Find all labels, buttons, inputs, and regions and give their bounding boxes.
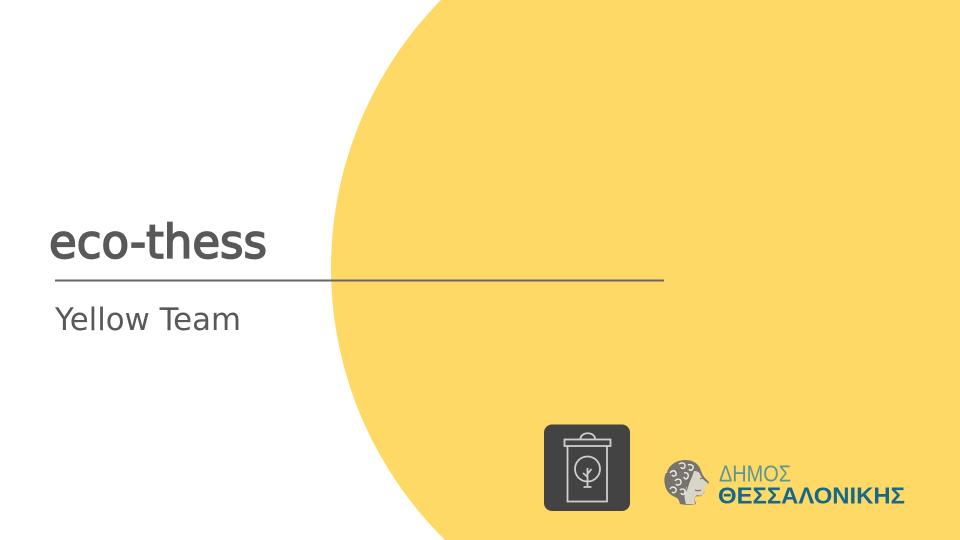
subtitle: Yellow Team bbox=[54, 302, 241, 338]
divider line bbox=[55, 280, 664, 282]
icon: recycling bin with tree bbox=[544, 424, 630, 511]
title: eco-thess bbox=[49, 215, 267, 269]
yellow circle bbox=[331, 0, 960, 540]
logo: municipality of Thessaloniki bbox=[664, 460, 905, 508]
logo head bbox=[664, 460, 709, 505]
logo text: Thessaloniki: ΘΕΣΣΑΛΟΝΙΚΗΣ bbox=[718, 482, 905, 508]
logo text: municipality: ΔΗΜΟΣ bbox=[719, 460, 791, 486]
